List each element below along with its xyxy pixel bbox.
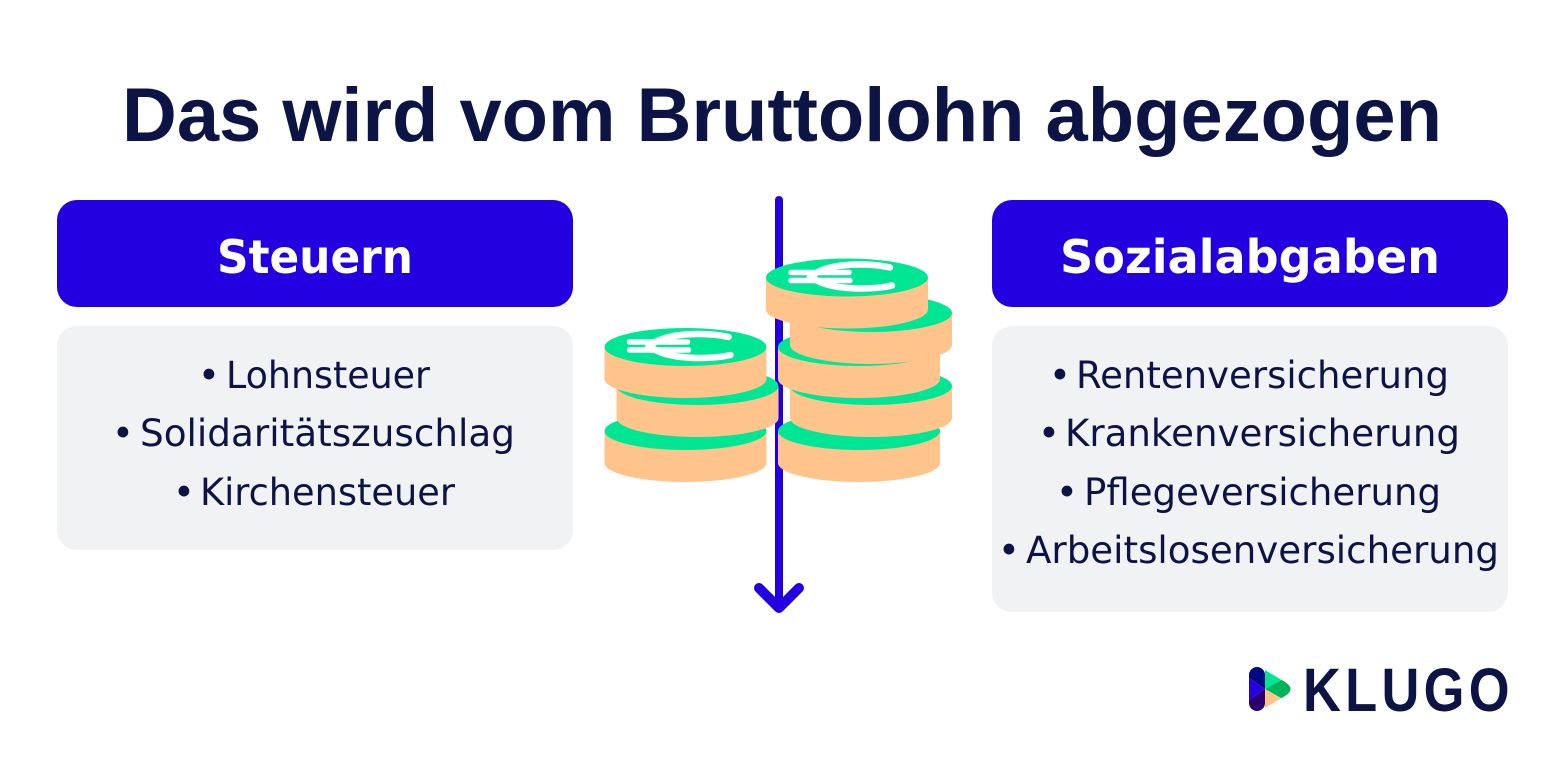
- list: Sozialabgaben: •: [1056, 471, 1078, 514]
- heading: Sozialabgaben: [992, 200, 1508, 307]
- list: Sozialabgaben: Krankenversicherung: [1065, 412, 1460, 455]
- list: Sozialabgaben: Arbeitslosenversicherung: [1026, 529, 1499, 572]
- arrow: downward deduction: [759, 200, 799, 608]
- logo wordmark: KLUGO: [1303, 656, 1514, 725]
- right coin stack: [766, 258, 952, 482]
- list: Sozialabgaben: •: [1038, 412, 1060, 455]
- left coin stack: [604, 328, 778, 482]
- list: Sozialabgaben: Pflegeversicherung: [1084, 471, 1441, 514]
- panel: Sozialabgaben: [992, 200, 1508, 612]
- list: Sozialabgaben: Rentenversicherung: [1076, 354, 1449, 397]
- list: Steuern: •: [198, 354, 220, 397]
- list: Sozialabgaben: •: [1049, 354, 1071, 397]
- heading: Steuern: [57, 200, 573, 307]
- list: Steuern: [57, 326, 573, 550]
- list: Steuern: •: [112, 412, 134, 455]
- logo: KLUGO: [1249, 667, 1508, 712]
- list: Steuern: Lohnsteuer: [226, 354, 431, 397]
- title: Das wird vom Bruttolohn abgezogen: [122, 73, 1442, 158]
- list: Steuern: Solidaritätszuschlag: [140, 412, 515, 455]
- list: Steuern: Kirchensteuer: [200, 471, 456, 514]
- heading: Sozialabgaben: Sozialabgaben: [1060, 230, 1440, 284]
- list: Steuern: •: [173, 471, 195, 514]
- list: Sozialabgaben: •: [998, 529, 1020, 572]
- icon: coin stacks: [604, 258, 952, 482]
- heading: Steuern: Steuern: [217, 230, 413, 284]
- list: Sozialabgaben: [992, 326, 1508, 612]
- panel: Steuern: [57, 200, 573, 550]
- logo play icon: [1249, 667, 1290, 711]
